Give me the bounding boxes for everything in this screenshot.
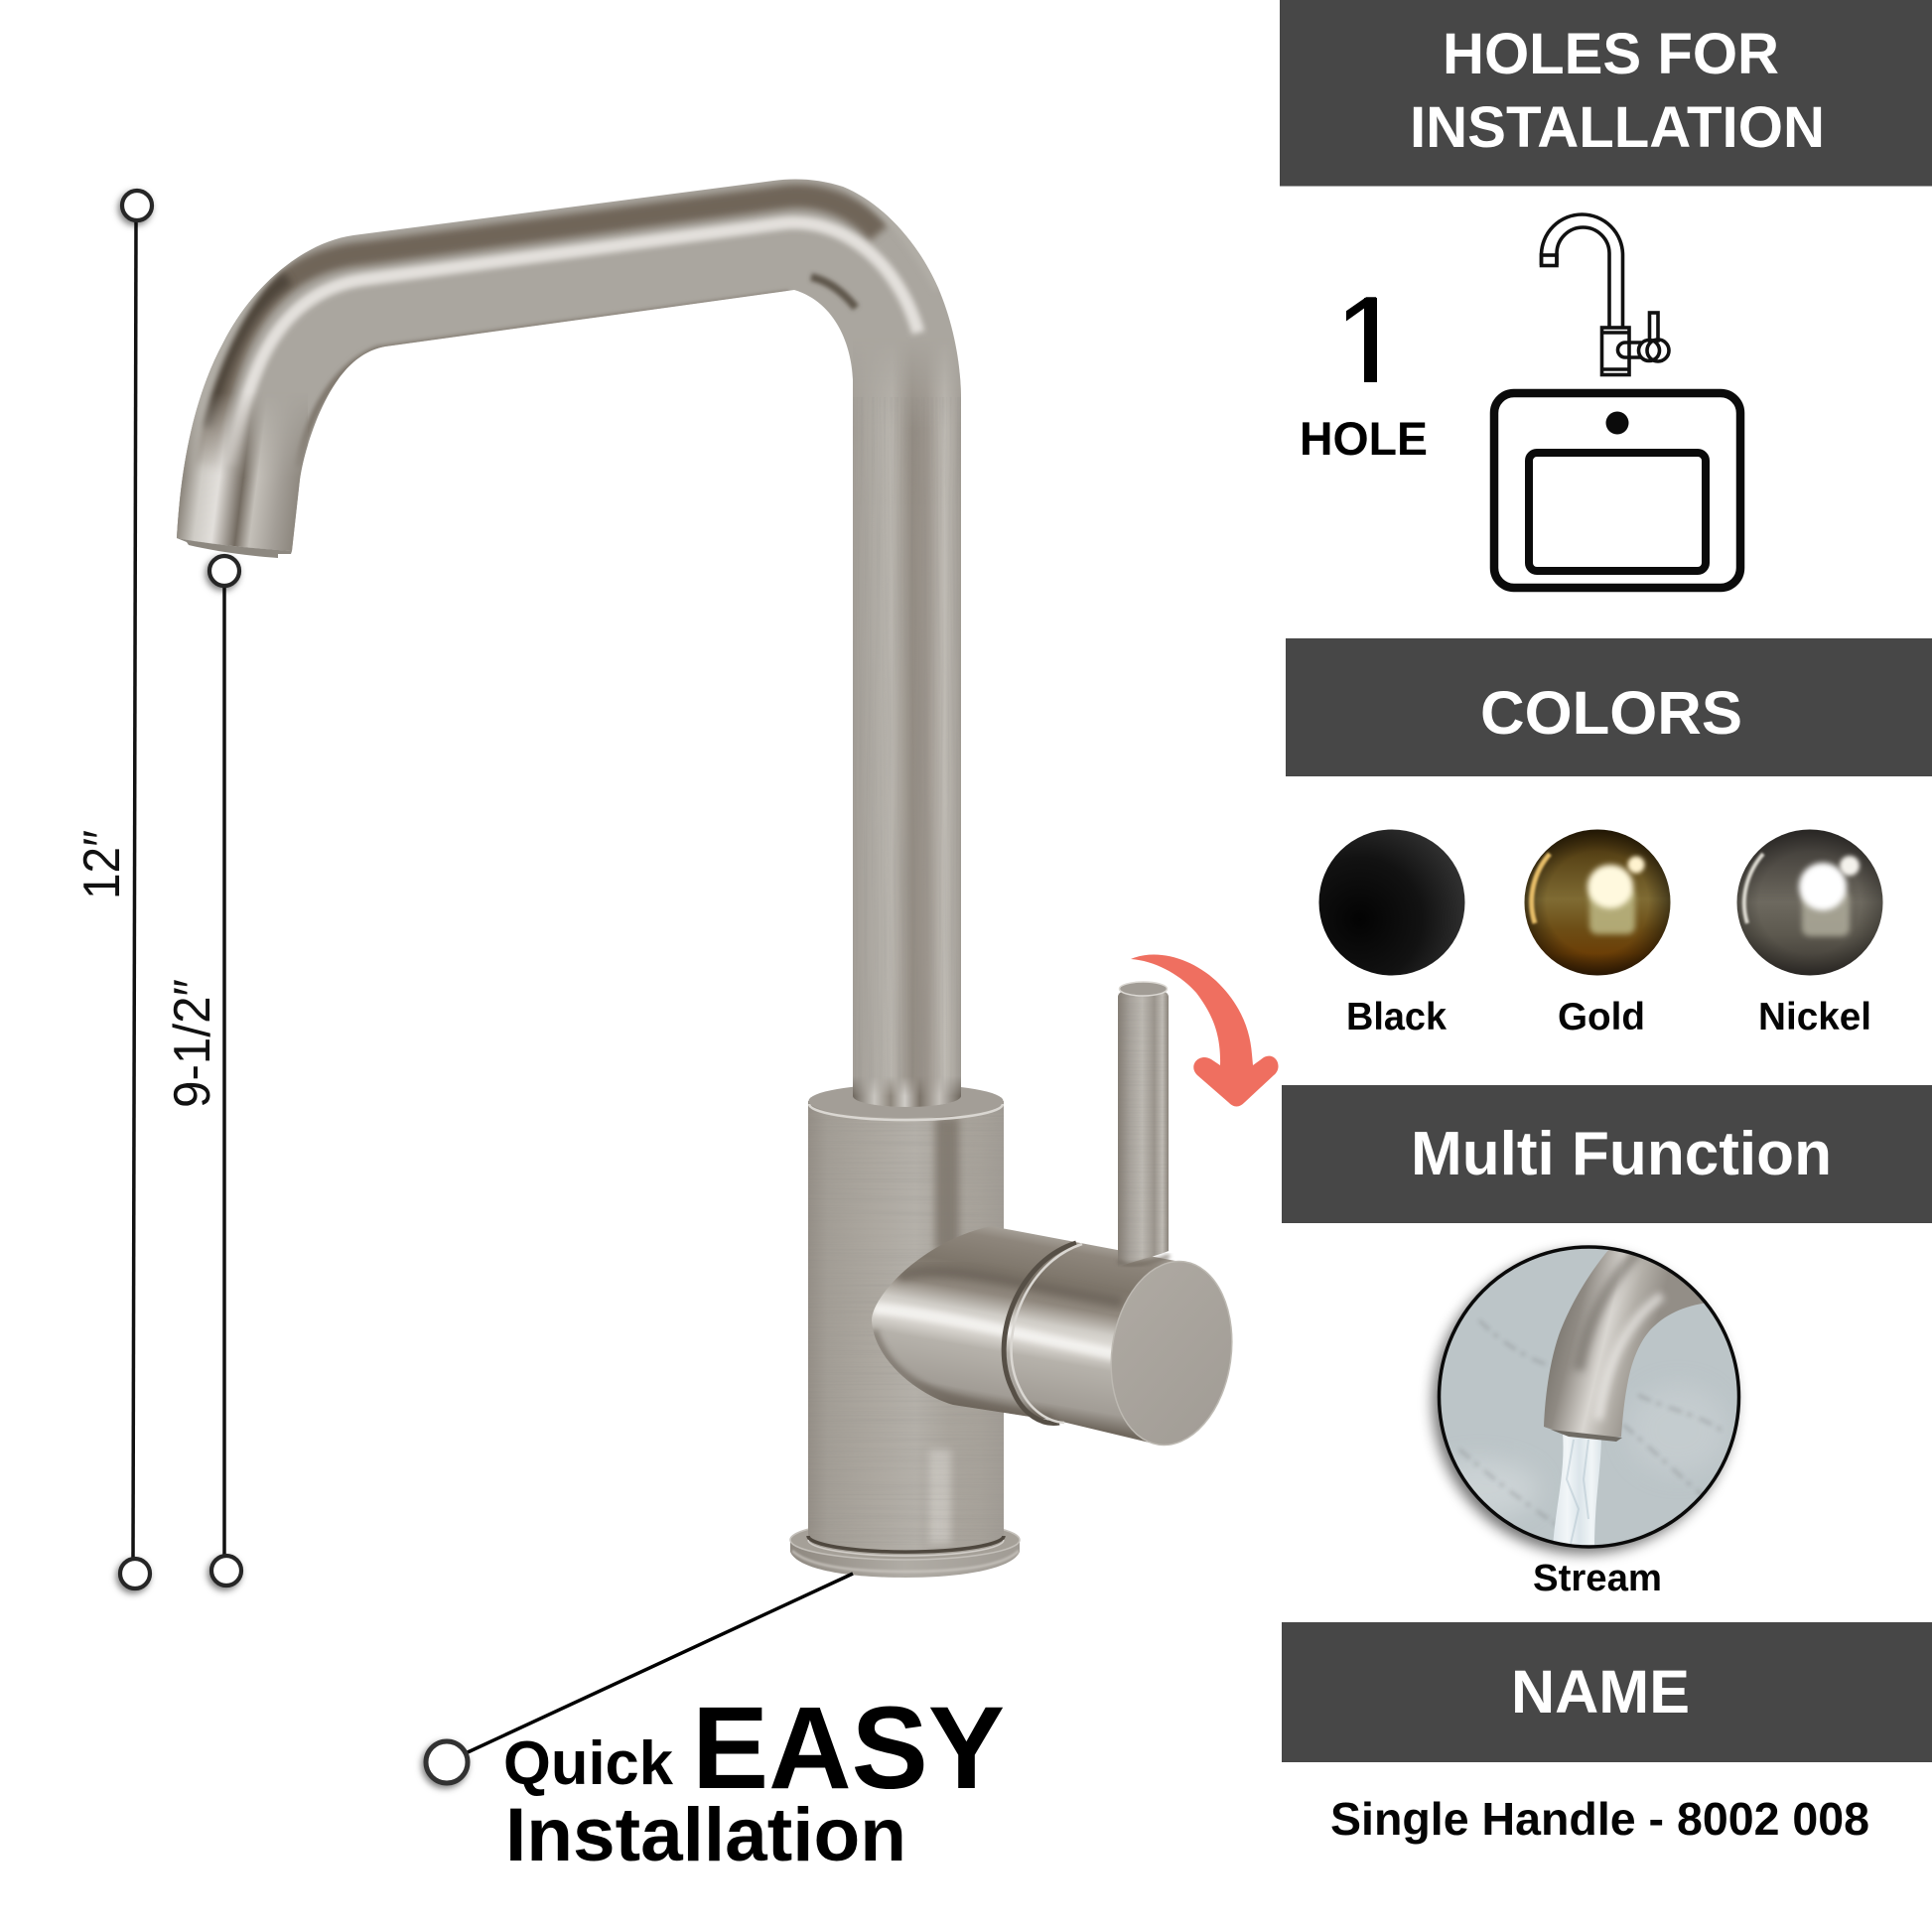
stream photo circle	[1438, 1245, 1741, 1549]
faucet spout tube	[149, 159, 973, 1112]
text: Installation: Installation	[505, 1793, 906, 1877]
callout marker	[426, 1741, 468, 1783]
heading bar: multi function: Multi Function	[1411, 1120, 1832, 1188]
swatch: gold	[1525, 830, 1670, 975]
water stream	[1553, 1433, 1601, 1549]
heading bar: name: NAME	[1511, 1658, 1690, 1725]
callout leader line	[468, 1574, 853, 1752]
number of holes: 1	[1334, 272, 1403, 409]
number of holes	[1303, 297, 1426, 455]
heading bar: colors: COLORS	[1480, 679, 1742, 747]
dimension marker spout	[209, 556, 239, 586]
panel: holes for installation	[1280, 0, 1932, 588]
swatch: black	[1318, 830, 1465, 1038]
label: stream: Stream	[1533, 1558, 1662, 1599]
stream photo shadow	[1433, 1252, 1734, 1554]
dimension marker top	[122, 191, 152, 220]
text: EASY: EASY	[692, 1683, 1005, 1814]
product name: Single Handle - 8002 008	[1330, 1793, 1869, 1845]
dimension marker bottom	[120, 1559, 150, 1588]
heading bar: holes for installation: INSTALLATION	[1410, 95, 1825, 160]
dimension label 9-1/2: 9-1/2″	[164, 979, 221, 1108]
heading bar: multi function	[1282, 1085, 1932, 1223]
faucet body cylinder	[808, 1082, 1004, 1559]
label: nickel: Nickel	[1758, 996, 1871, 1038]
handle end cap	[1100, 1254, 1243, 1452]
panel: name	[1282, 1622, 1932, 1845]
handle pipe	[872, 1226, 1191, 1446]
red motion arrow	[1131, 955, 1279, 1106]
dimension: 9-1/2 inch spout reach	[164, 556, 241, 1586]
number of holes: HOLE	[1300, 412, 1428, 465]
heading bar: holes for installation: HOLES FOR	[1443, 22, 1779, 86]
panel: colors	[1286, 638, 1932, 1038]
dimension label 12: 12″	[73, 830, 131, 899]
heading bar: name	[1282, 1622, 1932, 1762]
label: gold: Gold	[1558, 996, 1645, 1038]
mini spout	[1544, 1250, 1704, 1438]
text: Quick: Quick	[503, 1729, 674, 1798]
heading bar: holes for installation	[1280, 0, 1932, 187]
callout: quick easy installation	[426, 1574, 1005, 1877]
body collar top	[808, 1084, 1003, 1118]
dimension: 12 inch height	[73, 191, 152, 1588]
faucet base plate	[790, 1519, 1020, 1578]
panel: multi function	[1282, 1085, 1932, 1599]
spout tip aerator	[177, 538, 292, 558]
faucet product illustration	[149, 159, 1243, 1578]
heading bar: colors	[1286, 638, 1932, 776]
icon: sink with one hole	[1494, 393, 1740, 588]
swatch: black: Black	[1346, 996, 1447, 1038]
handle lever	[1118, 982, 1170, 1267]
swatch: nickel	[1737, 830, 1882, 975]
dimension marker deck	[211, 1556, 241, 1586]
icon: faucet line drawing	[1541, 214, 1669, 375]
